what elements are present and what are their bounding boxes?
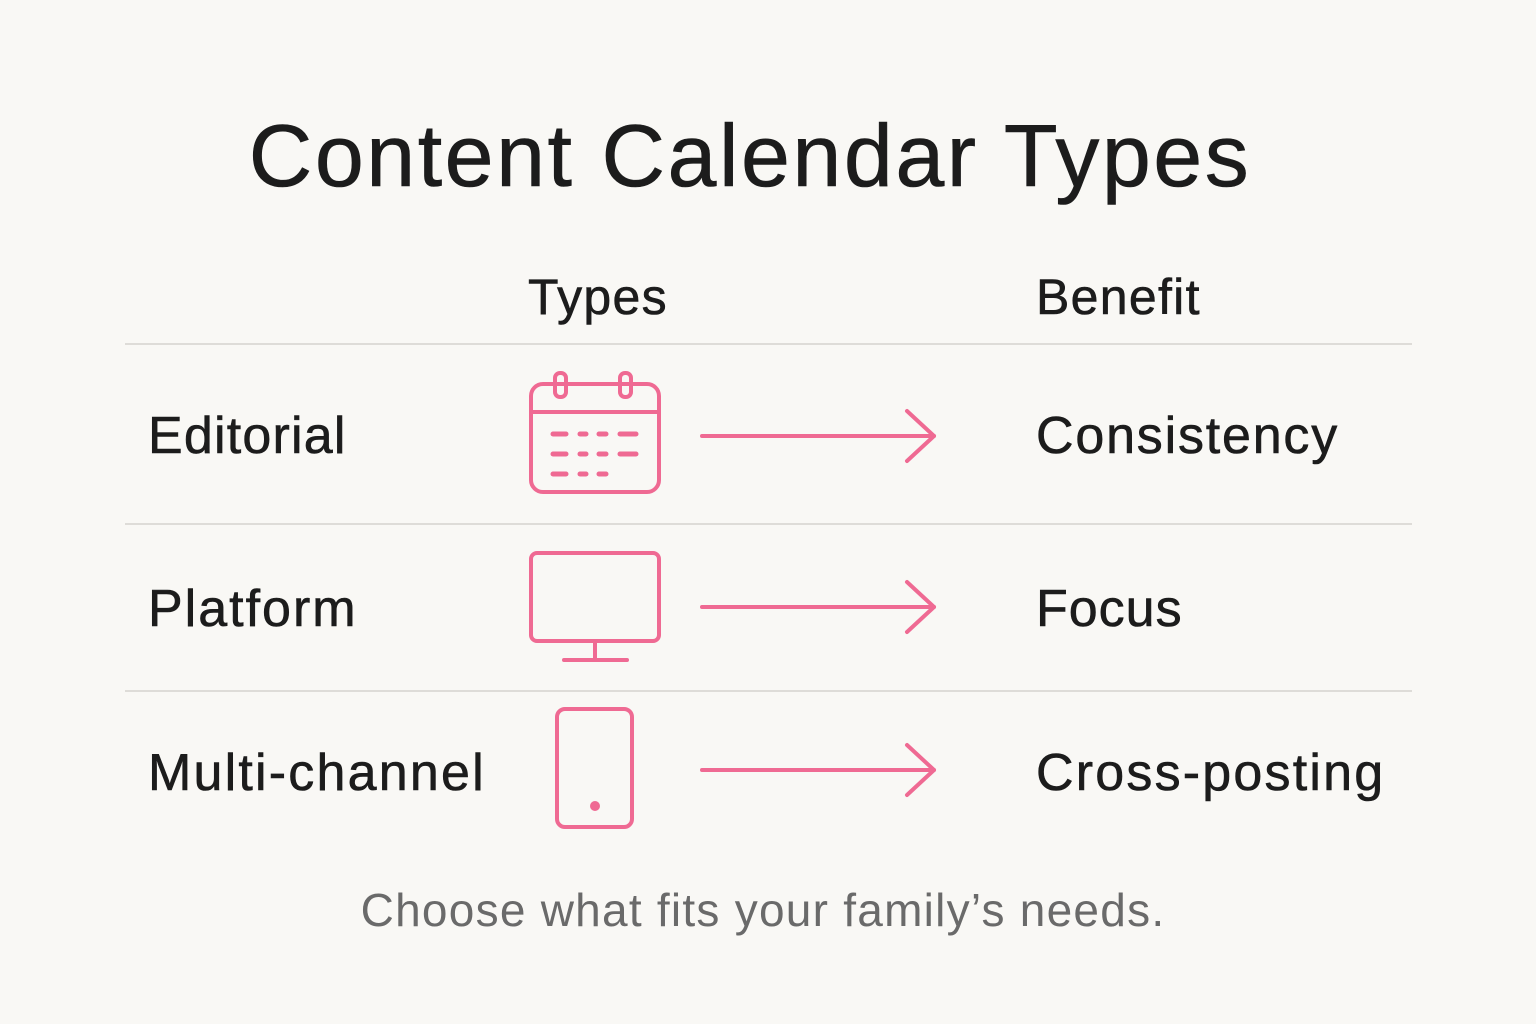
row label: Platform: Platform: [148, 580, 358, 638]
footer text: Choose what fits your family’s needs.: [361, 884, 1165, 936]
benefit: Cross-posting: Cross-posting: [1036, 744, 1385, 802]
benefit: Focus: Focus: [1036, 580, 1183, 638]
header: types: Types: [528, 269, 668, 325]
row label: Multi-channel: Multi-channel: [148, 744, 486, 802]
benefit: Consistency: Consistency: [1036, 407, 1339, 465]
icon: phone: [557, 709, 632, 827]
title: Content Calendar Types: [249, 106, 1251, 205]
header: benefit: Benefit: [1036, 269, 1201, 325]
icon: monitor: [531, 553, 659, 660]
arrow: row 2: [702, 582, 934, 632]
arrow: row 3: [702, 745, 934, 795]
icon: calendar: [531, 373, 659, 492]
arrow: row 1: [702, 411, 934, 461]
row label: Editorial: Editorial: [148, 407, 347, 465]
